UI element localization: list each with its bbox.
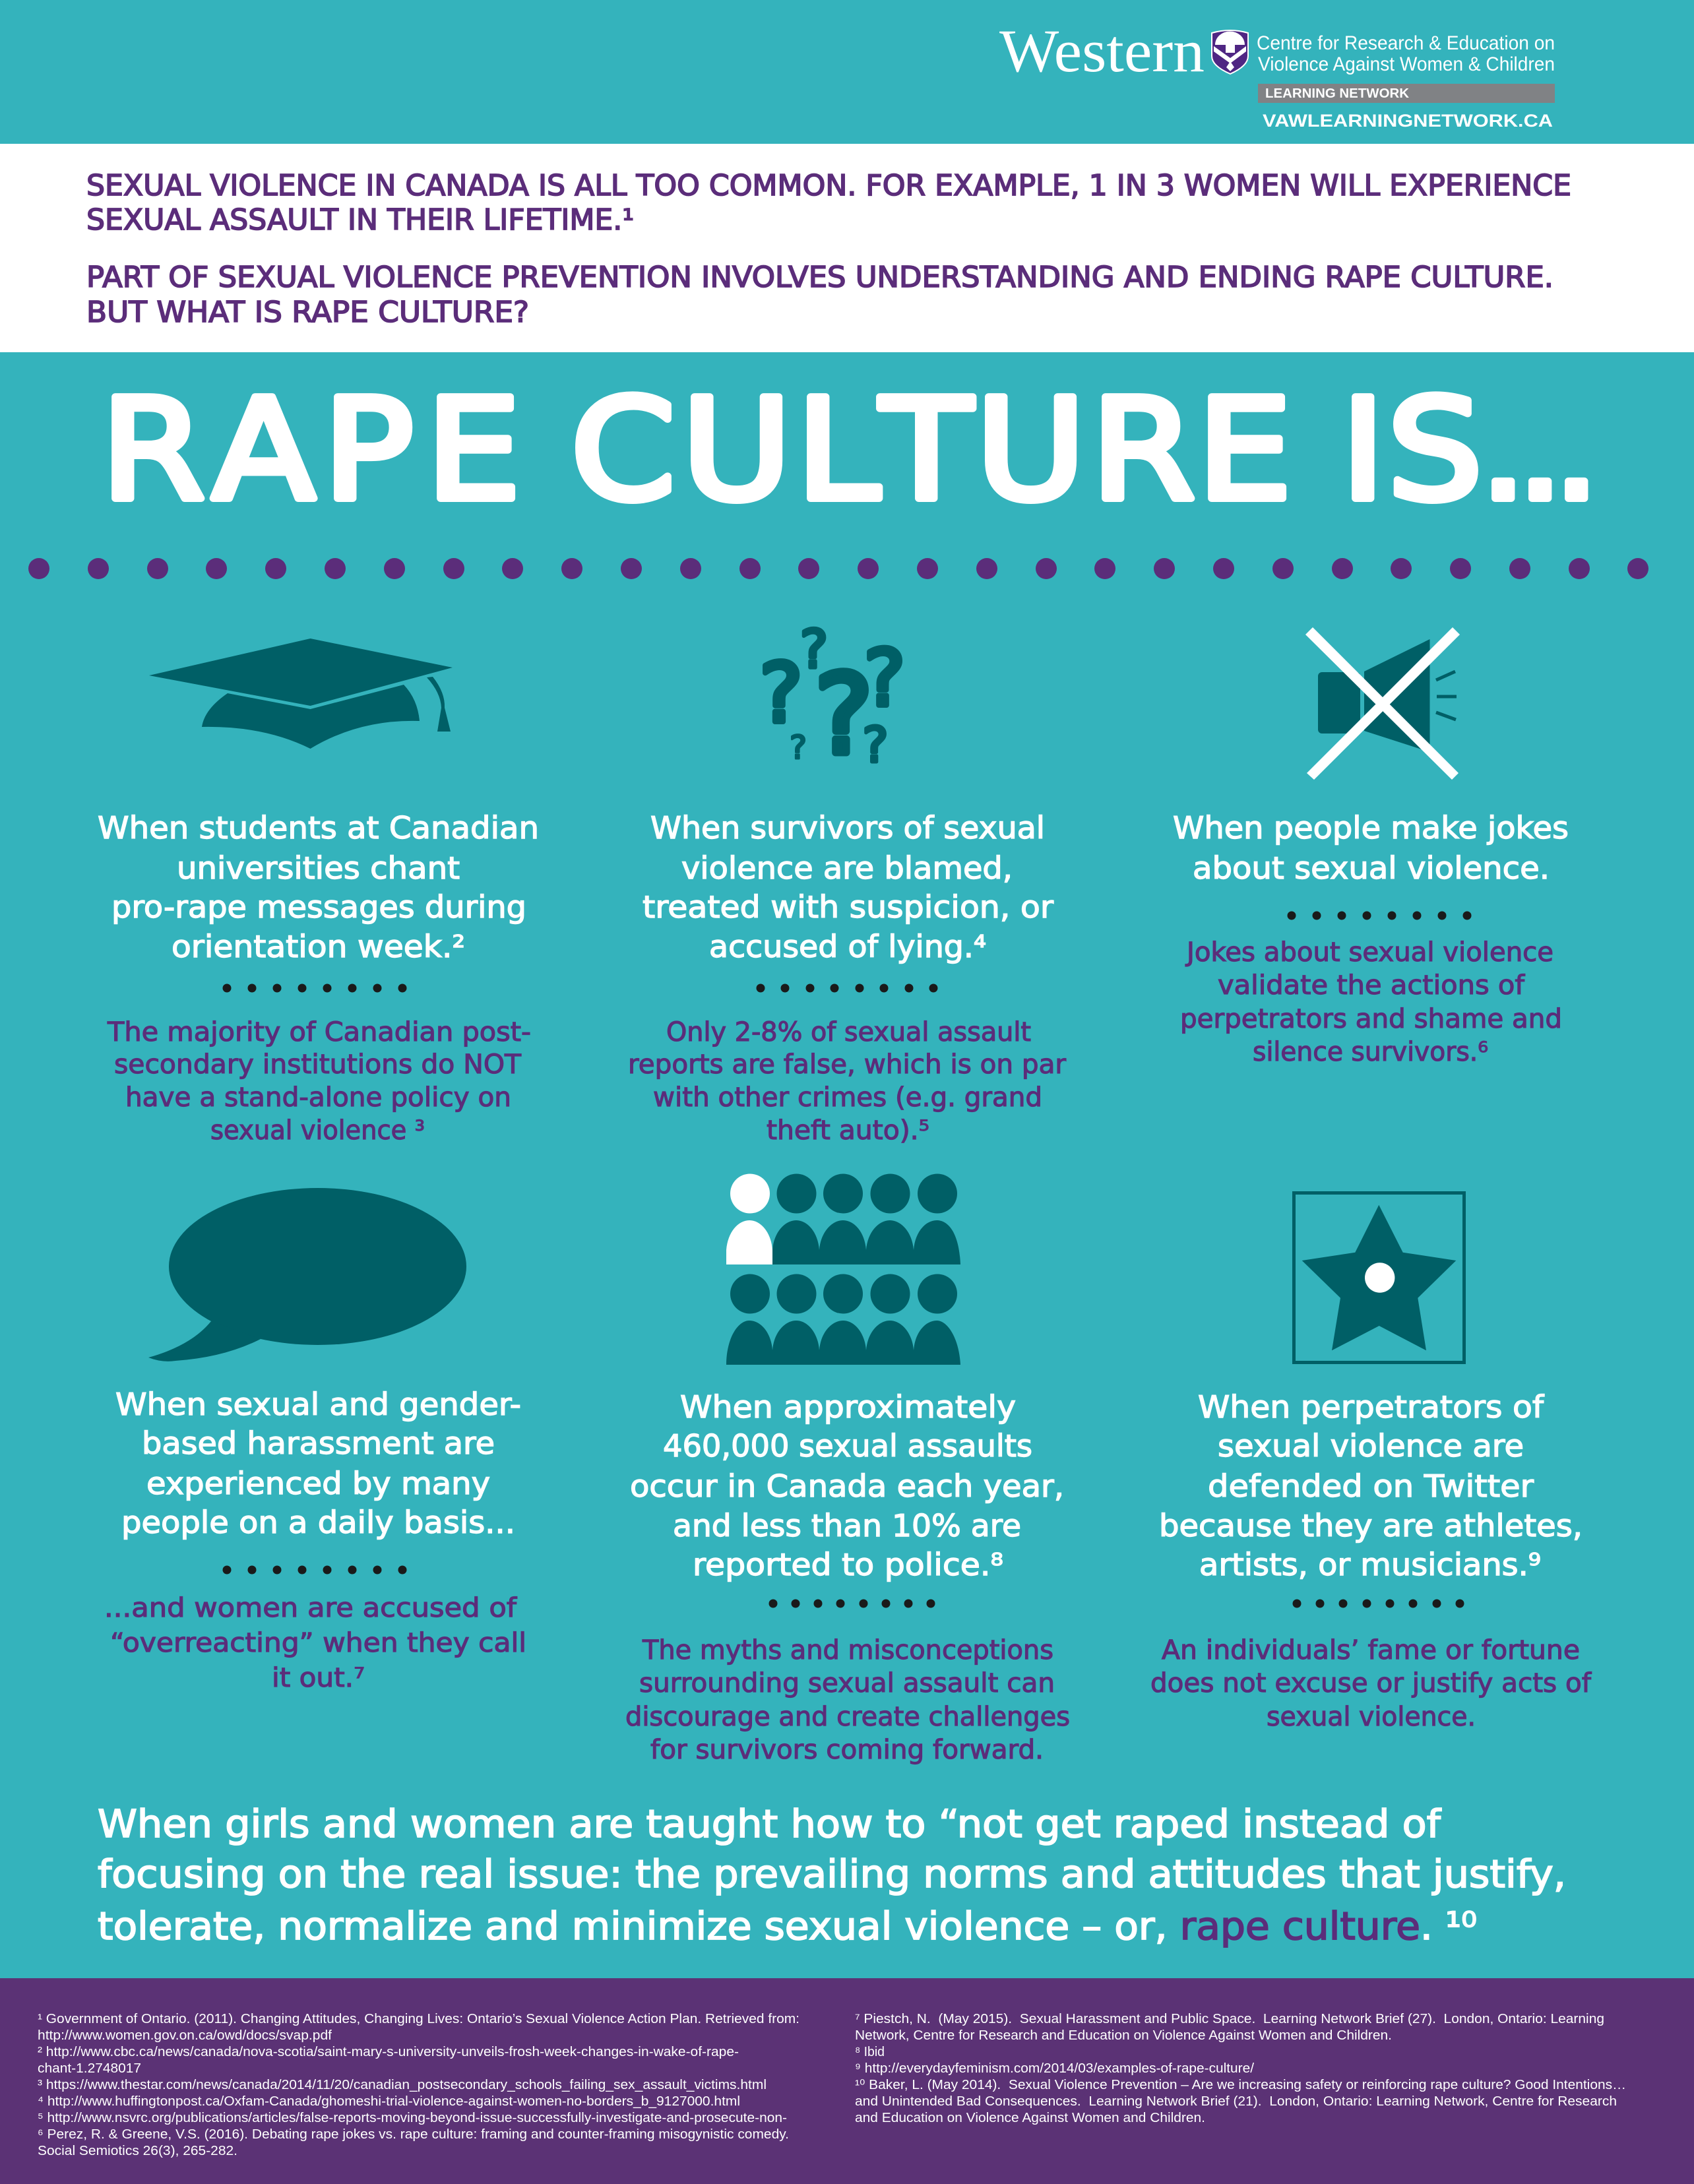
- explanation: discourage and create challenges: [625, 1702, 1070, 1732]
- heading: violence are blamed,: [681, 850, 1013, 886]
- icon: question marks: ?: [800, 619, 828, 680]
- explanation: it out.⁷: [272, 1663, 365, 1693]
- explanation: [628, 1017, 1067, 1146]
- explanation: perpetrators and shame and: [1180, 1004, 1562, 1034]
- explanation: “overreacting” when they call: [110, 1628, 526, 1658]
- heading: [98, 810, 539, 964]
- explanation: Jokes about sexual violence: [1185, 937, 1553, 968]
- wordmark: Western: Western: [999, 17, 1205, 84]
- heading: universities chant: [177, 850, 460, 886]
- explanation: Only 2-8% of sexual assault: [666, 1017, 1031, 1047]
- references column 2: ⁸ Ibid: [855, 2045, 885, 2059]
- references column 2: [855, 2012, 1626, 2125]
- references column 1: ⁵ http://www.nsvrc.org/publications/articles/false-reports-moving-beyond-issue-successfully-investigate-and-prosecute-non-: [38, 2111, 787, 2125]
- heading: [630, 1389, 1064, 1582]
- references column 1: http://www.women.gov.on.ca/owd/docs/svap.pdf: [38, 2028, 332, 2043]
- dots: [769, 1599, 935, 1608]
- dots: [223, 1566, 406, 1574]
- explanation: [1180, 937, 1562, 1067]
- explanation: [625, 1635, 1070, 1765]
- heading: When perpetrators of: [1198, 1389, 1545, 1425]
- icon: question marks: ?: [759, 646, 803, 741]
- explanation: [107, 1017, 531, 1146]
- explanation: secondary institutions do NOT: [114, 1049, 522, 1080]
- heading: When approximately: [680, 1389, 1016, 1425]
- intro text: statistic: [86, 169, 1571, 237]
- heading: [643, 810, 1053, 964]
- heading: sexual violence are: [1218, 1428, 1524, 1464]
- heading: When people make jokes: [1173, 810, 1569, 846]
- explanation: theft auto).⁵: [767, 1115, 929, 1146]
- explanation: silence survivors.⁶: [1253, 1037, 1488, 1067]
- explanation: sexual violence.: [1267, 1702, 1476, 1732]
- references column 2: Network, Centre for Research and Education on Violence Against Women and Children.: [855, 2028, 1392, 2043]
- icon: graduation cap: [149, 639, 453, 749]
- references column 1: Social Semiotics 26(3), 265-282.: [38, 2144, 237, 2158]
- references column 1: ¹ Government of Ontario. (2011). Changing Attitudes, Changing Lives: Ontario’s Sexual Violence Action Plan. Retrieved from:: [38, 2012, 800, 2026]
- learning network bar: [1258, 84, 1555, 103]
- references column 2: and Unintended Bad Consequences. Learning Network Brief (21). London, Ontario: Learning Network, Centre for Research: [855, 2094, 1617, 2109]
- heading: people on a daily basis...: [121, 1505, 515, 1540]
- explanation: sexual violence ³: [210, 1115, 425, 1146]
- heading: accused of lying.⁴: [709, 929, 986, 964]
- references column 2: ⁷ Piestch, N. (May 2015). Sexual Harassment and Public Space. Learning Network Brief (27). London, Ontario: Learning: [855, 2012, 1604, 2026]
- references column 2: ⁹ http://everydayfeminism.com/2014/03/examples-of-rape-culture/: [855, 2061, 1254, 2076]
- explanation: validate the actions of: [1218, 970, 1525, 1001]
- intro text: question: BUT WHAT IS RAPE CULTURE?: [86, 296, 529, 329]
- heading: [1159, 1389, 1583, 1582]
- heading: When survivors of sexual: [650, 810, 1045, 846]
- icon: question marks: ?: [864, 633, 905, 724]
- footer: references: [0, 1978, 1694, 2184]
- references column 1: ⁶ Perez, R. & Greene, V.S. (2016). Debating rape jokes vs. rape culture: framing and counter-framing misogynistic comedy.: [38, 2127, 789, 2142]
- heading: reported to police.⁸: [693, 1547, 1003, 1582]
- panel: jokes: [1173, 627, 1569, 1067]
- organisation name: [1257, 32, 1555, 75]
- references column 1: [38, 2012, 800, 2158]
- panel: unreported assaults: [625, 1174, 1070, 1765]
- icon: Western crest: [1212, 30, 1248, 74]
- icon: question marks: [759, 619, 905, 779]
- explanation: [1150, 1635, 1592, 1732]
- title: RAPE CULTURE IS...: [101, 369, 1600, 531]
- dots: [1288, 912, 1471, 920]
- dots: [223, 984, 406, 992]
- panel: harassment: [104, 1188, 526, 1693]
- explanation: The majority of Canadian post-: [107, 1017, 531, 1047]
- purple dot divider: [28, 558, 1648, 579]
- explanation: surrounding sexual assault can: [639, 1668, 1055, 1699]
- heading: and less than 10% are: [673, 1508, 1021, 1544]
- icon: star in frame: [1294, 1193, 1464, 1363]
- organisation name: Violence Against Women & Children: [1258, 53, 1555, 75]
- heading: because they are athletes,: [1159, 1508, 1583, 1544]
- panel: survivors blamed: [628, 619, 1067, 1146]
- explanation: The myths and misconceptions: [642, 1635, 1053, 1666]
- icon: question marks: ?: [790, 729, 807, 766]
- heading: [1173, 810, 1569, 886]
- heading: pro-rape messages during: [111, 889, 526, 925]
- icon: speech bubble: [148, 1188, 466, 1361]
- heading: orientation week.²: [172, 929, 465, 964]
- heading: 460,000 sexual assaults: [663, 1428, 1032, 1464]
- explanation: does not excuse or justify acts of: [1150, 1668, 1592, 1699]
- explanation: [104, 1593, 526, 1693]
- dots: [1293, 1599, 1464, 1608]
- closing statement: When girls and women are taught how to “not get raped instead of: [98, 1801, 1442, 1846]
- heading: When students at Canadian: [98, 810, 539, 846]
- references column 1: ² http://www.cbc.ca/news/canada/nova-scotia/saint-mary-s-university-unveils-frosh-week-changes-in-wake-of-rape-: [38, 2045, 739, 2059]
- heading: artists, or musicians.⁹: [1199, 1547, 1541, 1582]
- intro text: question: PART OF SEXUAL VIOLENCE PREVENTION INVOLVES UNDERSTANDING AND ENDING RAPE CULTURE.: [86, 261, 1553, 294]
- references column 2: and Education on Violence Against Women and Children.: [855, 2111, 1205, 2125]
- explanation: have a stand-alone policy on: [125, 1082, 511, 1113]
- icon: muted speaker: [1305, 627, 1460, 780]
- icon: crowd of people: [726, 1174, 960, 1365]
- heading: based harassment are: [142, 1425, 495, 1461]
- explanation: with other crimes (e.g. grand: [653, 1082, 1042, 1113]
- icon: question marks: ?: [815, 652, 873, 779]
- dots: [756, 984, 938, 992]
- explanation: An individuals’ fame or fortune: [1162, 1635, 1580, 1666]
- explanation: reports are false, which is on par: [628, 1049, 1067, 1080]
- intro text: statistic: SEXUAL ASSAULT IN THEIR LIFETIME.¹: [86, 203, 634, 237]
- references column 1: ⁴ http://www.huffingtonpost.ca/Oxfam-Canada/ghomeshi-trial-violence-against-women-no-borders_b_9127000.html: [38, 2094, 740, 2109]
- heading: treated with suspicion, or: [643, 889, 1053, 925]
- learning network bar: LEARNING NETWORK: [1265, 86, 1410, 101]
- references column 1: chant-1.2748017: [38, 2061, 141, 2076]
- heading: about sexual violence.: [1193, 850, 1550, 886]
- references column 1: ³ https://www.thestar.com/news/canada/2014/11/20/canadian_postsecondary_schools_failing_sex_assault_victims.html: [38, 2078, 767, 2092]
- heading: occur in Canada each year,: [630, 1468, 1064, 1504]
- intro panel: [0, 144, 1694, 352]
- explanation: ...and women are accused of: [104, 1593, 517, 1623]
- icon: question marks: ?: [862, 717, 889, 774]
- explanation: for survivors coming forward.: [650, 1735, 1044, 1765]
- heading: experienced by many: [146, 1466, 490, 1501]
- heading: When sexual and gender-: [115, 1387, 521, 1422]
- panel: perpetrators defended: [1150, 1193, 1592, 1732]
- heading: defended on Twitter: [1208, 1468, 1534, 1504]
- logo block: Western and Learning Network: [999, 17, 1555, 131]
- intro text: statistic: SEXUAL VIOLENCE IN CANADA IS ALL TOO COMMON. FOR EXAMPLE, 1 IN 3 WOMEN WILL EXPERIENCE: [86, 169, 1571, 203]
- references column 2: ¹⁰ Baker, L. (May 2014). Sexual Violence Prevention – Are we increasing safety or reinforcing rape culture? Good Intentions…: [855, 2078, 1626, 2092]
- intro text: question: [86, 261, 1553, 329]
- heading: [115, 1387, 521, 1540]
- closing statement: [98, 1801, 1566, 1949]
- closing statement: tolerate, normalize and minimize sexual violence – or, rape culture. ¹⁰: [98, 1904, 1477, 1949]
- panel: university chants: [98, 639, 539, 1146]
- website: VAWLEARNINGNETWORK.CA: [1263, 111, 1553, 131]
- closing statement: focusing on the real issue: the prevailing norms and attitudes that justify,: [98, 1852, 1566, 1896]
- organisation name: Centre for Research & Education on: [1257, 32, 1555, 54]
